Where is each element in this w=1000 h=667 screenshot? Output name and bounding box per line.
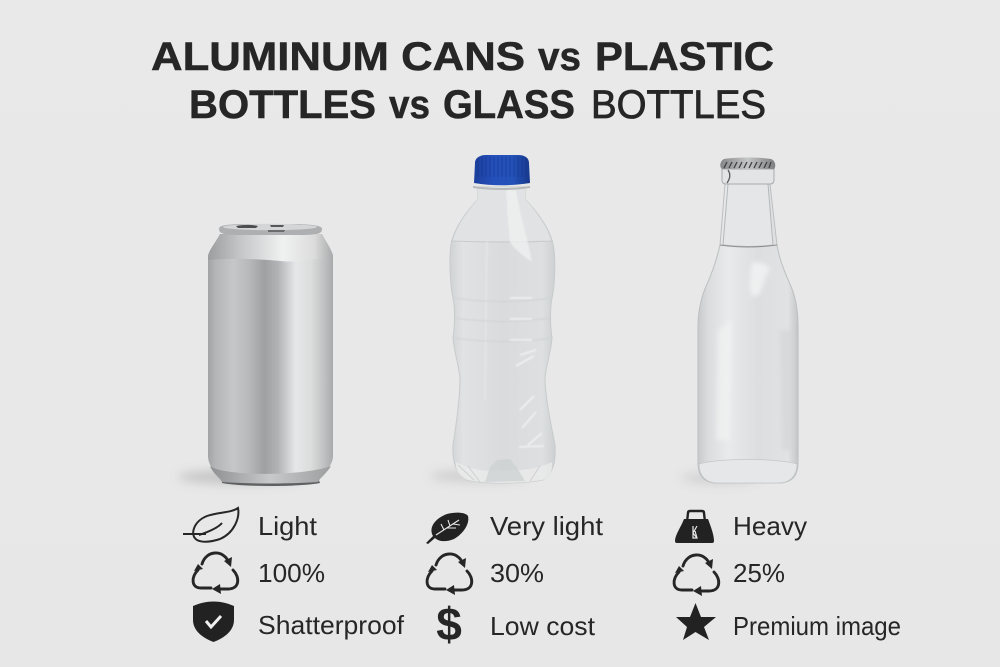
reflections — [716, 262, 792, 450]
label: 100 percent: 100% — [258, 558, 325, 588]
icon: dollar sign: $ — [436, 598, 462, 650]
title: BOTTLES — [591, 83, 766, 127]
label: very light: Very light — [490, 511, 604, 541]
glass bottle — [682, 158, 798, 484]
icon: recycling — [674, 555, 719, 596]
plastic column features — [426, 511, 604, 650]
blue cap — [473, 155, 530, 190]
inner neck and waterline — [723, 184, 773, 246]
title: GLASS — [443, 83, 575, 127]
title: ALUMINUM CANS — [151, 35, 525, 79]
icon: light leaf outline — [183, 508, 238, 542]
bottle body — [450, 187, 555, 483]
glass body — [698, 184, 798, 483]
icon: recycling — [193, 553, 238, 594]
title: BOTTLES — [189, 83, 376, 127]
title: PLASTIC — [595, 35, 774, 79]
collar — [722, 169, 774, 184]
label: shatterproof: Shatterproof — [258, 610, 405, 640]
crown cap — [720, 158, 775, 169]
bottle base — [456, 462, 552, 483]
label: premium image: Premium image — [733, 611, 901, 641]
icon: shield with check — [193, 602, 234, 642]
label: heavy: Heavy — [733, 511, 807, 541]
plastic bottle — [430, 155, 555, 483]
title — [151, 35, 774, 127]
can column features — [183, 508, 405, 642]
title: vs — [538, 35, 581, 79]
title: vs — [389, 83, 430, 127]
icon: heavy weight — [675, 511, 714, 543]
highlights — [453, 190, 552, 447]
label: light: Light — [258, 511, 318, 541]
icon: recycling — [427, 554, 472, 595]
label: low cost: Low cost — [490, 611, 596, 641]
label: 30 percent: 30% — [490, 558, 544, 588]
air gap above water — [453, 187, 551, 241]
label: 25 percent: 25% — [733, 558, 785, 588]
glass column features — [674, 511, 901, 641]
aluminum can — [178, 224, 333, 486]
icon: star — [676, 603, 716, 640]
icon: very light leaf filled — [426, 513, 468, 544]
